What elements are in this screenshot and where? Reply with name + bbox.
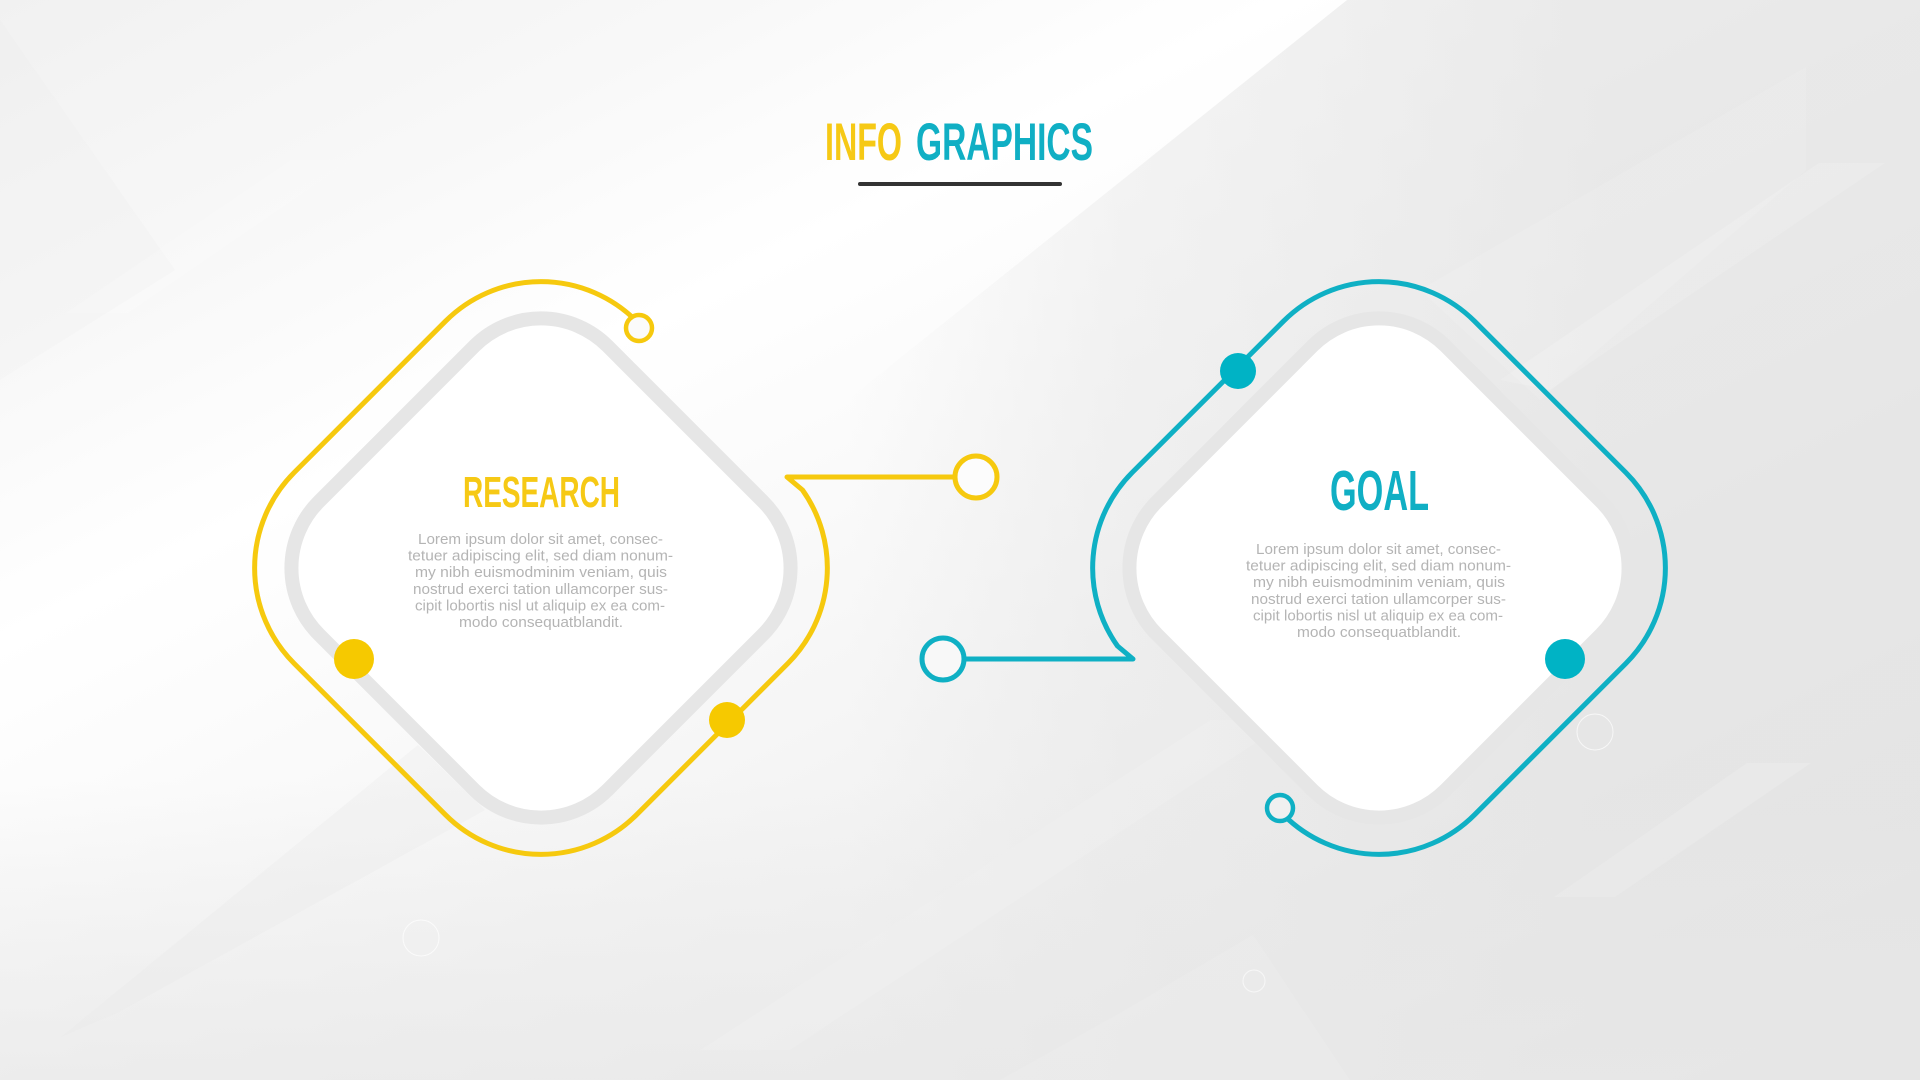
research yellow outline and connector xyxy=(255,282,957,854)
goal large ring xyxy=(922,638,964,680)
research body text: tetuer adipiscing elit, sed diam nonum- xyxy=(408,548,673,565)
title underline xyxy=(860,182,1060,186)
goal teal outline and connector xyxy=(963,282,1665,854)
research heading: RESEARCH xyxy=(463,468,620,517)
goal dot upper left xyxy=(1220,353,1256,389)
goal body text: Lorem ipsum dolor sit amet, consec- xyxy=(1256,541,1501,558)
goal white diamond xyxy=(1091,280,1667,856)
title: INFO xyxy=(825,113,902,172)
goal heading: GOAL xyxy=(1330,459,1429,523)
goal body text: nostrud exerci tation ullamcorper sus- xyxy=(1251,591,1506,608)
research small ring xyxy=(626,315,652,341)
title xyxy=(825,113,1093,172)
research large ring xyxy=(955,456,997,498)
goal body text: cipit lobortis nisl ut aliquip ex ea com- xyxy=(1253,607,1503,624)
research body text: my nibh euismodminim veniam, quis xyxy=(415,564,667,581)
research body text: cipit lobortis nisl ut aliquip ex ea com- xyxy=(415,597,665,614)
research white diamond xyxy=(253,280,829,856)
goal body text: tetuer adipiscing elit, sed diam nonum- xyxy=(1246,558,1511,575)
goal body text: my nibh euismodminim veniam, quis xyxy=(1253,574,1505,591)
title: GRAPHICS xyxy=(916,113,1093,172)
research body text: nostrud exerci tation ullamcorper sus- xyxy=(413,581,668,598)
goal body text: modo consequatblandit. xyxy=(1297,624,1461,641)
research body text: modo consequatblandit. xyxy=(459,614,623,631)
research body text xyxy=(408,531,673,631)
research body text: Lorem ipsum dolor sit amet, consec- xyxy=(418,531,663,548)
panel: goal xyxy=(922,280,1667,856)
panel: research xyxy=(253,280,997,856)
goal body text xyxy=(1246,541,1511,641)
goal small ring xyxy=(1267,795,1293,821)
research dot left xyxy=(334,639,374,679)
research dot lower right xyxy=(709,702,745,738)
goal dot right xyxy=(1545,639,1585,679)
